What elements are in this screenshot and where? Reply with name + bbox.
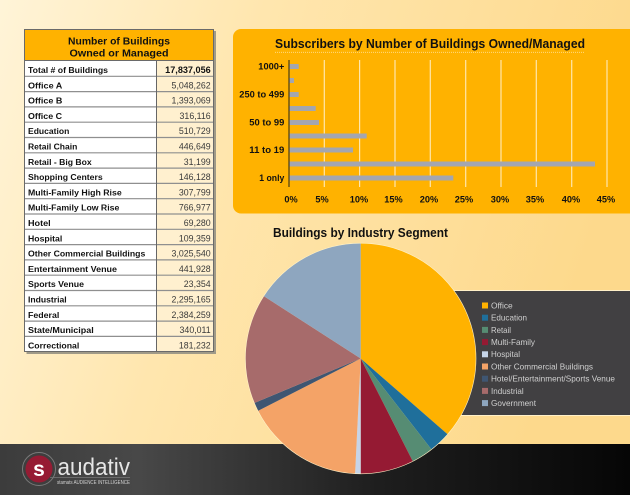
- value labels: 10%: [350, 194, 368, 204]
- pie chart title: Buildings by Industry Segment: [273, 226, 449, 240]
- table rows: Federal: [28, 310, 59, 320]
- table rows: Industrial: [28, 294, 67, 304]
- value labels: 15%: [384, 194, 403, 204]
- table rows: 316,116: [180, 111, 211, 121]
- legend entries: Office: [491, 300, 513, 310]
- legend entries: [482, 300, 615, 408]
- legend entries: Government: [491, 398, 537, 408]
- legend entries: Other Commercial Buildings: [491, 361, 593, 371]
- category labels: 1 only: [259, 173, 285, 183]
- table heading: Number of Buildings: [68, 35, 170, 47]
- table rows: 441,928: [179, 264, 211, 274]
- value labels: 25%: [455, 194, 473, 204]
- table rows: Office C: [28, 111, 63, 121]
- value labels: [284, 194, 615, 204]
- category labels: 1000+: [258, 62, 284, 72]
- panel: number of buildings table: [24, 30, 216, 354]
- table rows: [28, 65, 211, 350]
- value labels: 35%: [526, 194, 544, 204]
- table rows: 146,128: [179, 172, 211, 182]
- grid lines: [324, 60, 607, 187]
- table rows: 340,011: [180, 325, 211, 335]
- category labels: 50 to 99: [249, 118, 284, 128]
- bars: [289, 64, 595, 180]
- table rows: Office A: [28, 80, 63, 90]
- table rows: Correctional: [28, 340, 79, 350]
- table heading: Owned or Managed: [70, 48, 168, 60]
- table rows: 5,048,262: [172, 80, 211, 90]
- table rows: 109,359: [179, 233, 211, 243]
- logo: audativ: s: [33, 458, 45, 481]
- legend entries: Retail: [491, 325, 511, 335]
- table rows: Hospital: [28, 233, 62, 243]
- table rows: Shopping Centers: [28, 172, 103, 182]
- pie chart: [245, 243, 476, 474]
- table rows: 2,295,165: [172, 294, 211, 304]
- table rows: 31,199: [184, 157, 211, 167]
- panel: subscribers bar chart: [233, 29, 630, 214]
- value labels: 45%: [597, 194, 615, 204]
- category labels: 250 to 499: [239, 90, 284, 100]
- table rows: Entertainment Venue: [28, 264, 117, 274]
- table rows: 307,799: [179, 187, 211, 197]
- table rows: Sports Venue: [28, 279, 84, 289]
- footer band: [0, 444, 630, 495]
- chart title: Subscribers by Number of Buildings Owned/Managed: [275, 37, 585, 51]
- value labels: 5%: [315, 194, 329, 204]
- table rows: 510,729: [179, 126, 211, 136]
- value labels: 0%: [284, 194, 298, 204]
- legend entries: Education: [491, 313, 527, 323]
- legend panel: [440, 290, 630, 416]
- table rows: 2,384,259: [172, 310, 211, 320]
- legend entries: Multi-Family: [491, 337, 536, 347]
- table rows: Education: [28, 126, 69, 136]
- table rows: Multi-Family High Rise: [28, 187, 122, 197]
- value labels: 40%: [562, 194, 580, 204]
- table rows: 181,232: [179, 340, 211, 350]
- value labels: 30%: [491, 194, 509, 204]
- table rows: 446,649: [179, 142, 211, 152]
- table rows: Retail - Big Box: [28, 157, 92, 167]
- table rows: 69,280: [184, 218, 211, 228]
- table rows: 23,354: [184, 279, 211, 289]
- table rows: Retail Chain: [28, 142, 77, 152]
- table rows: Multi-Family Low Rise: [28, 203, 119, 213]
- table rows: 17,837,056: [165, 65, 211, 75]
- logo: audativ: stamats AUDIENCE INTELLIGENCE: [57, 480, 130, 486]
- logo: audativ: [22, 452, 130, 486]
- table rows: 766,977: [179, 203, 211, 213]
- legend entries: Industrial: [491, 386, 524, 396]
- table rows: 3,025,540: [172, 249, 211, 259]
- table rows: Office B: [28, 96, 62, 106]
- category labels: 11 to 19: [249, 145, 284, 155]
- table rows: 1,393,069: [172, 96, 211, 106]
- axis line: [288, 60, 290, 187]
- table heading: [24, 30, 214, 60]
- value labels: 20%: [420, 194, 438, 204]
- logo: audativ: audativ: [58, 454, 130, 481]
- table rows: Total # of Buildings: [28, 65, 108, 75]
- table rows: Other Commercial Buildings: [28, 249, 145, 259]
- category labels: [239, 62, 285, 183]
- legend entries: Hospital: [491, 349, 520, 359]
- legend entries: Hotel/Entertainment/Sports Venue: [491, 374, 615, 384]
- table rows: State/Municipal: [28, 325, 94, 335]
- table rows: Hotel: [28, 218, 51, 228]
